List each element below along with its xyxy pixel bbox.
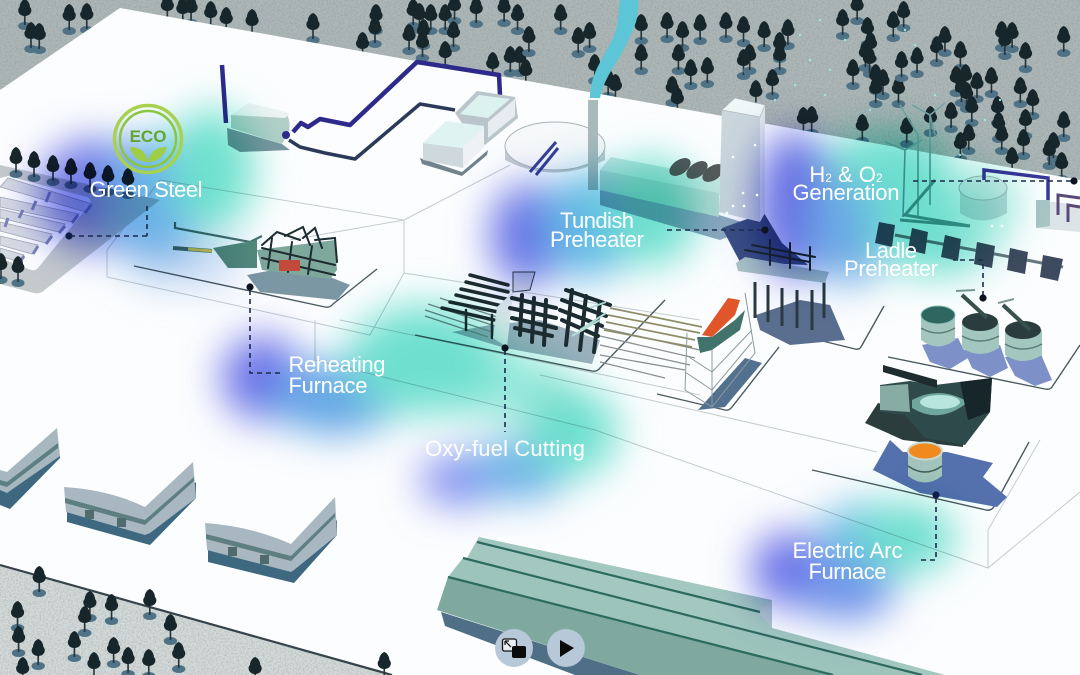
callout: tundish preheater: Preheater [550, 227, 644, 252]
chimney [588, 100, 598, 190]
oxy-fuel cutting line [425, 272, 762, 410]
south-west ground edge [0, 565, 392, 675]
callout: green steel: Green Steel [90, 177, 202, 202]
forest: south-west trees [11, 566, 391, 675]
callout: reheating furnace: Reheating [288, 352, 386, 377]
chute holder [697, 310, 745, 353]
hydrogen tank [959, 170, 1080, 232]
warehouse 1 [0, 428, 60, 509]
ladle arms [962, 295, 1030, 330]
warehouse 2 [64, 462, 196, 545]
ladle preheater rig [736, 240, 845, 345]
furnace deck [865, 403, 963, 447]
callout: tundish preheater: Tundish [560, 208, 634, 233]
callout: ladle preheater: Preheater [844, 256, 938, 281]
boiler and purple pipes [222, 62, 500, 159]
callout: electric arc furnace: Furnace [808, 559, 886, 584]
solar panel rows [0, 178, 92, 262]
preheater hall [600, 154, 755, 240]
electric arc furnace [865, 365, 1007, 507]
icon: eco badge: ECO [130, 127, 166, 146]
scaffold shadow [698, 358, 762, 410]
cutting comb [442, 275, 508, 338]
solar field [0, 147, 160, 293]
exhaust cylinders [666, 154, 727, 186]
button: play [547, 629, 585, 667]
circular tank [505, 122, 605, 175]
tower [719, 98, 765, 222]
solar panel brackets [5, 192, 91, 262]
rails [600, 328, 700, 378]
furnace machinery [880, 378, 992, 445]
callout: electric arc furnace [792, 491, 940, 584]
callout: reheating furnace [246, 283, 386, 398]
ladle shadows [922, 338, 1052, 386]
boiler shadow [227, 128, 290, 152]
hot slab chute [702, 298, 740, 337]
feed lines [425, 298, 500, 337]
glow: reheating furnace [222, 305, 567, 434]
glow: tundish preheater [490, 158, 698, 287]
hot rails [604, 308, 702, 347]
callout: oxy-fuel cutting: Oxy-fuel Cutting [425, 436, 585, 461]
callout: hydrogen and oxygen generation [792, 162, 1078, 205]
boiler body [231, 112, 290, 144]
dark pipe [289, 104, 455, 159]
warehouse 3 [205, 497, 337, 583]
glow: electric arc furnace [752, 502, 955, 620]
tower sparkles [726, 144, 1003, 227]
wind turbines [885, 103, 970, 226]
furnace right tower [960, 378, 992, 420]
chimney smoke [590, 0, 638, 98]
purple pipe [222, 62, 500, 132]
callout: green steel [65, 177, 203, 240]
reheating furnace [173, 222, 350, 300]
callout: hydrogen and oxygen generation: H2 & O2 [809, 162, 883, 187]
scaffold [685, 293, 755, 407]
forest: north-east trees [554, 0, 1070, 183]
callout: hydrogen and oxygen generation: Generation [792, 180, 900, 205]
ladles [921, 290, 1052, 386]
long green hall [437, 537, 945, 675]
warehouses [0, 428, 337, 583]
callout: tundish preheater [550, 208, 769, 252]
ground floor pads and outlines [107, 165, 1080, 568]
button: picture in picture [495, 629, 533, 667]
ladle bodies [921, 315, 1042, 361]
hydrogen solar panels [875, 222, 1063, 281]
molten ladle [908, 452, 942, 482]
turquoise particles [774, 19, 1001, 156]
icon: eco badge [114, 106, 182, 172]
callout: electric arc furnace: Electric Arc [792, 538, 902, 563]
callout: ladle preheater: Ladle [865, 238, 917, 263]
callout: oxy-fuel cutting [425, 344, 585, 461]
cutting machinery right cluster [560, 290, 610, 352]
callout: ladle preheater [844, 238, 987, 302]
storage boxes [420, 91, 518, 176]
glow: oxy-fuel cutting [420, 387, 618, 506]
cutting machinery left cluster [510, 295, 556, 345]
callout: reheating furnace: Furnace [288, 373, 368, 398]
tower shadow [722, 213, 808, 265]
glow: green steel [37, 108, 254, 286]
glow: hydrogen and ladle [757, 128, 1017, 285]
white block [493, 292, 513, 347]
machinery highlights [572, 302, 606, 336]
furnace shadow [873, 440, 1007, 507]
oxy-fuel shadow [452, 320, 600, 364]
forest: north-west trees [18, 0, 536, 90]
